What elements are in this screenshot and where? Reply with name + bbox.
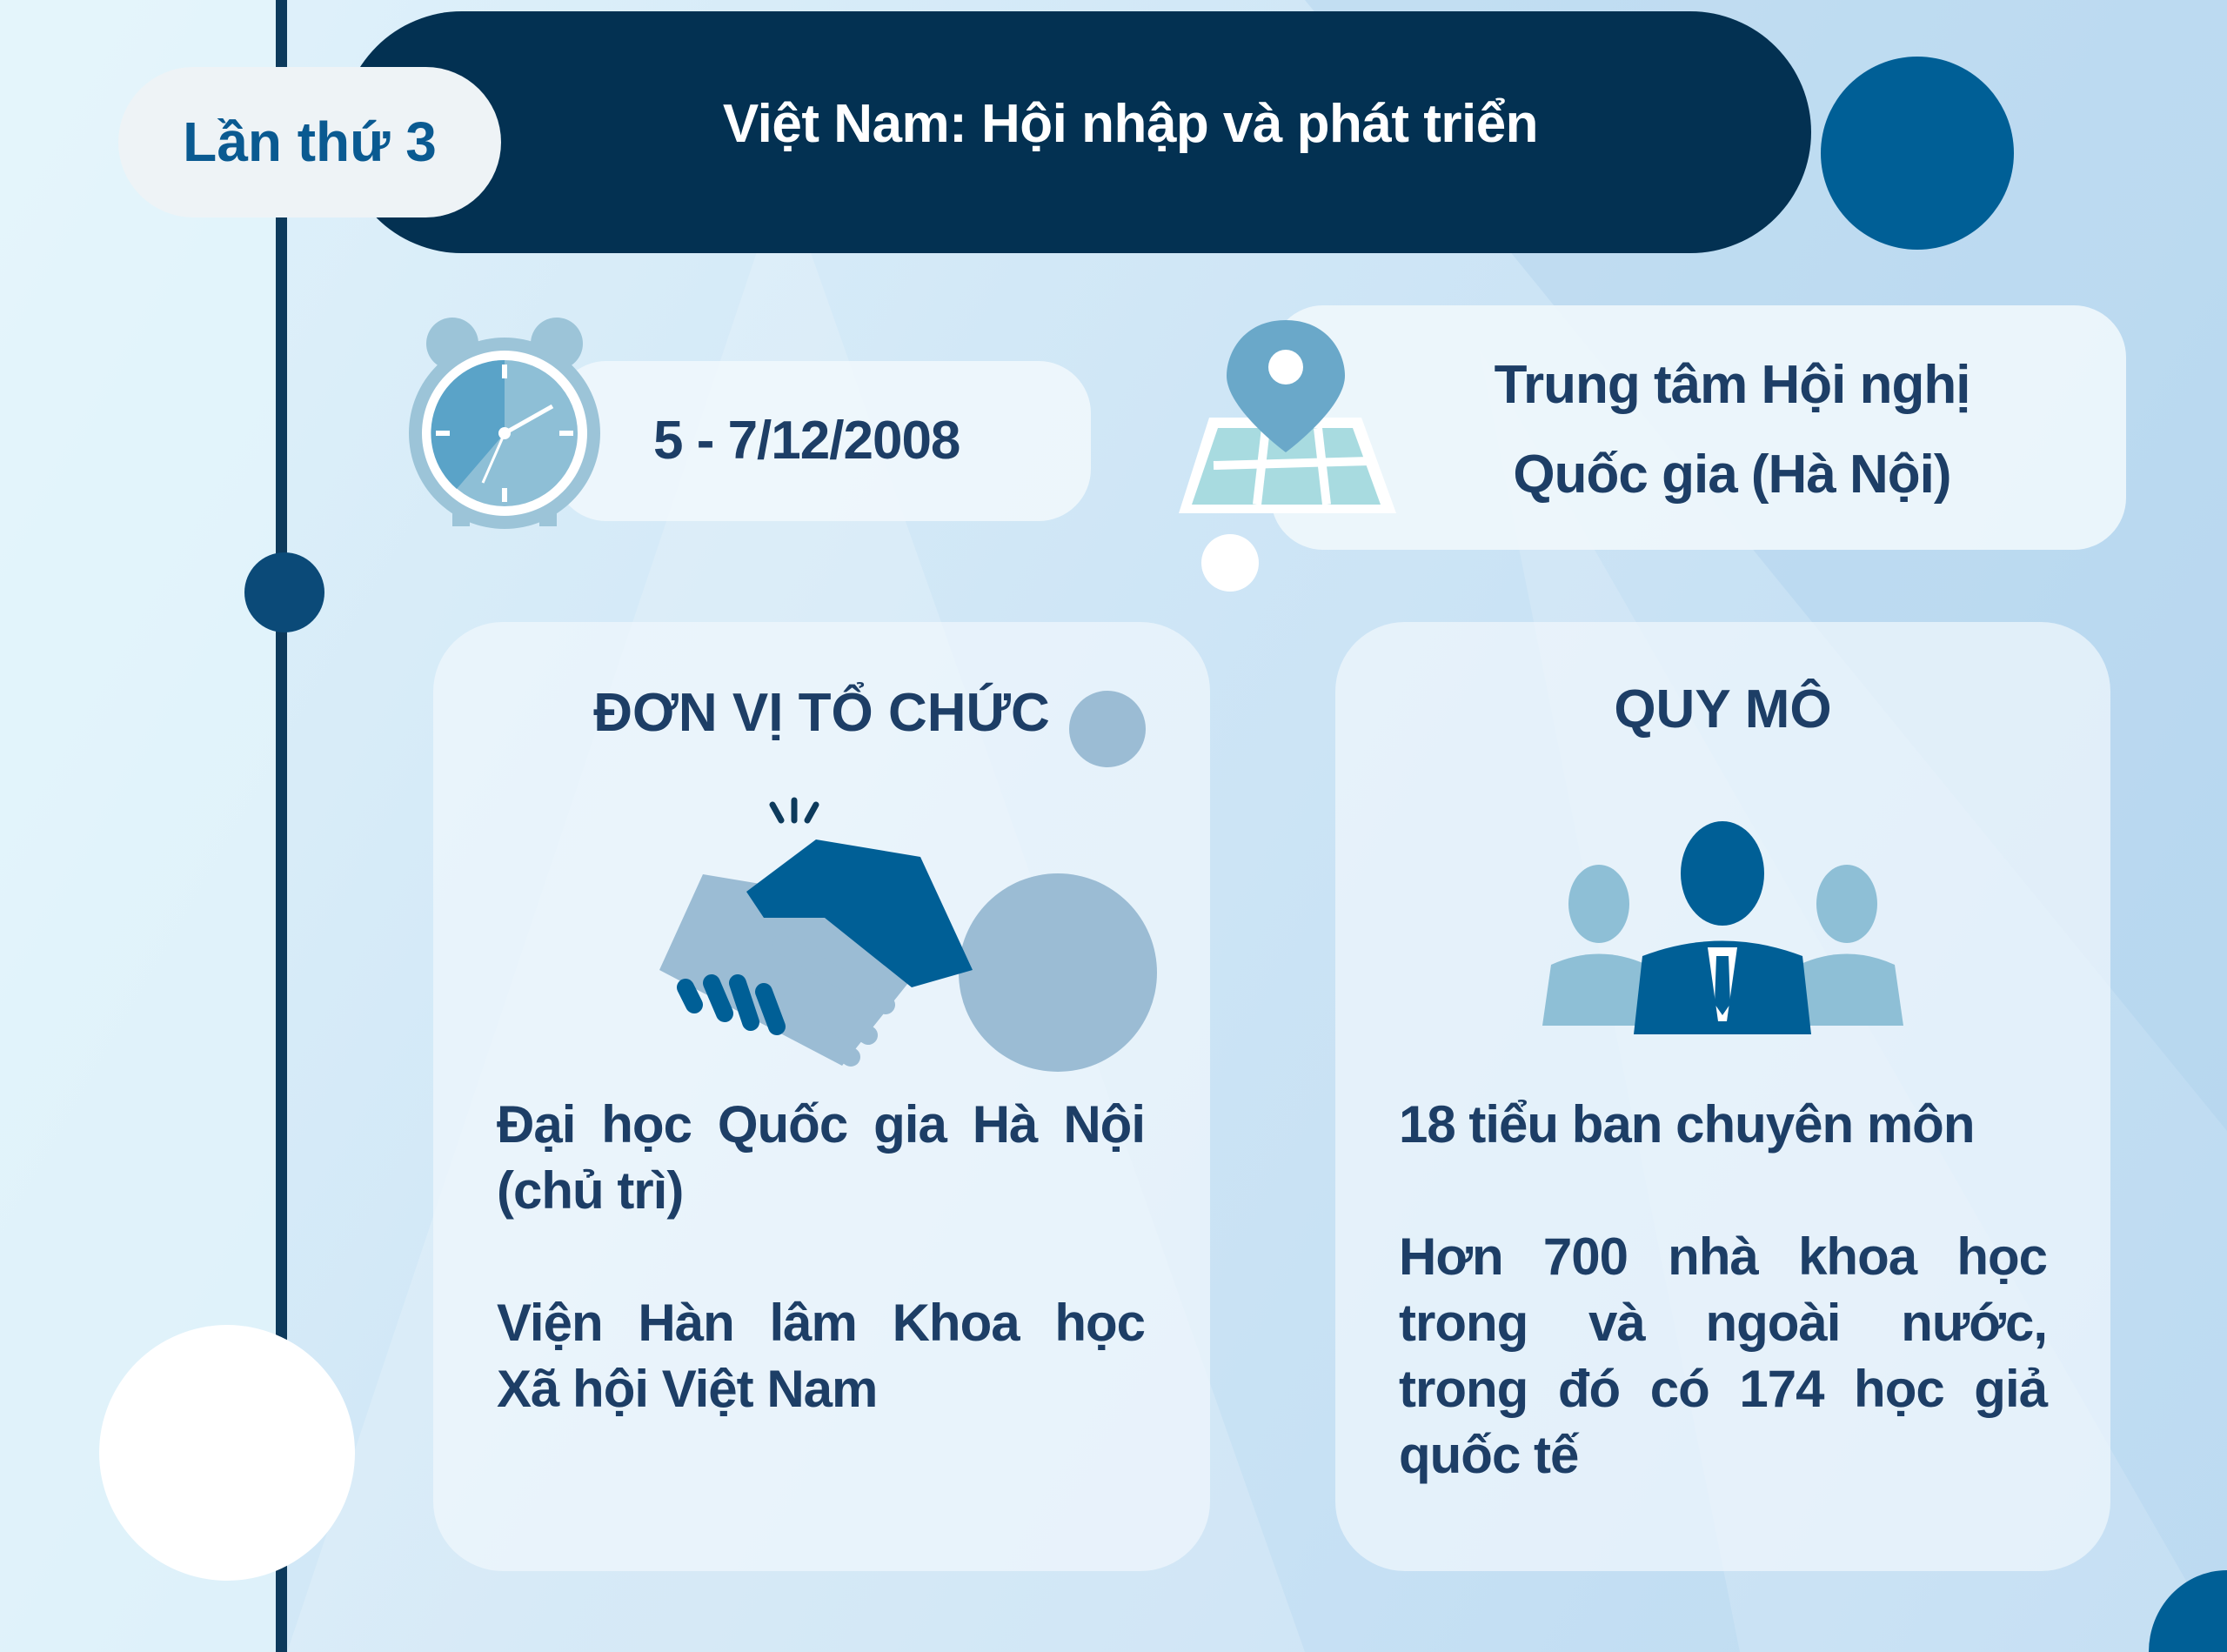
edition pill: Lần thứ 3 — [183, 110, 437, 173]
location text: Quốc gia (Hà Nội) — [1513, 445, 1951, 505]
white dot under map — [1201, 534, 1259, 592]
panel: scale: trong đó có 174 học giả — [1399, 1360, 2047, 1418]
text: organizer list: Đại học Quốc gia Hà Nội — [497, 1095, 1145, 1154]
heading: scale: QUY MÔ — [1614, 679, 1832, 739]
edition pill — [118, 67, 501, 217]
panel: scale — [1335, 622, 2110, 1571]
decorative circle — [1069, 691, 1146, 767]
panel: scale: quốc tế — [1399, 1426, 1578, 1484]
location text — [1495, 355, 1970, 505]
icon: clock — [409, 318, 600, 529]
text: organizer list: Viện Hàn lâm Khoa học — [497, 1294, 1145, 1352]
location pill — [1271, 305, 2126, 550]
text: organizer list: (chủ trì) — [497, 1161, 683, 1220]
heading: organizers: ĐƠN VỊ TỔ CHỨC — [593, 683, 1050, 743]
icon: map pin — [1179, 320, 1396, 513]
title bar — [341, 11, 1811, 253]
location text: Trung tâm Hội nghị — [1495, 355, 1970, 415]
decorative circle top right — [1821, 57, 2014, 250]
decorative circle bottom right — [2149, 1570, 2227, 1652]
text: scale details: 18 tiểu ban chuyên môn — [1399, 1095, 1974, 1154]
text: organizer list: Xã hội Việt Nam — [497, 1360, 877, 1418]
panel: scale: trong và ngoài nước, — [1399, 1294, 2047, 1352]
panel: scale: Hơn 700 nhà khoa học — [1399, 1227, 2047, 1286]
text: organizer list — [497, 1095, 1145, 1418]
date text: 5 - 7/12/2008 — [653, 411, 960, 471]
vertical timeline line — [276, 0, 287, 1652]
date pill — [554, 361, 1091, 521]
timeline dot — [244, 552, 324, 632]
icon: people — [1542, 821, 1903, 1034]
title text: Việt Nam: Hội nhập và phát triển — [723, 94, 1538, 154]
decorative white circle bottom left — [99, 1325, 355, 1581]
icon: handshake — [659, 797, 1157, 1072]
panel: organizers — [433, 622, 1210, 1571]
